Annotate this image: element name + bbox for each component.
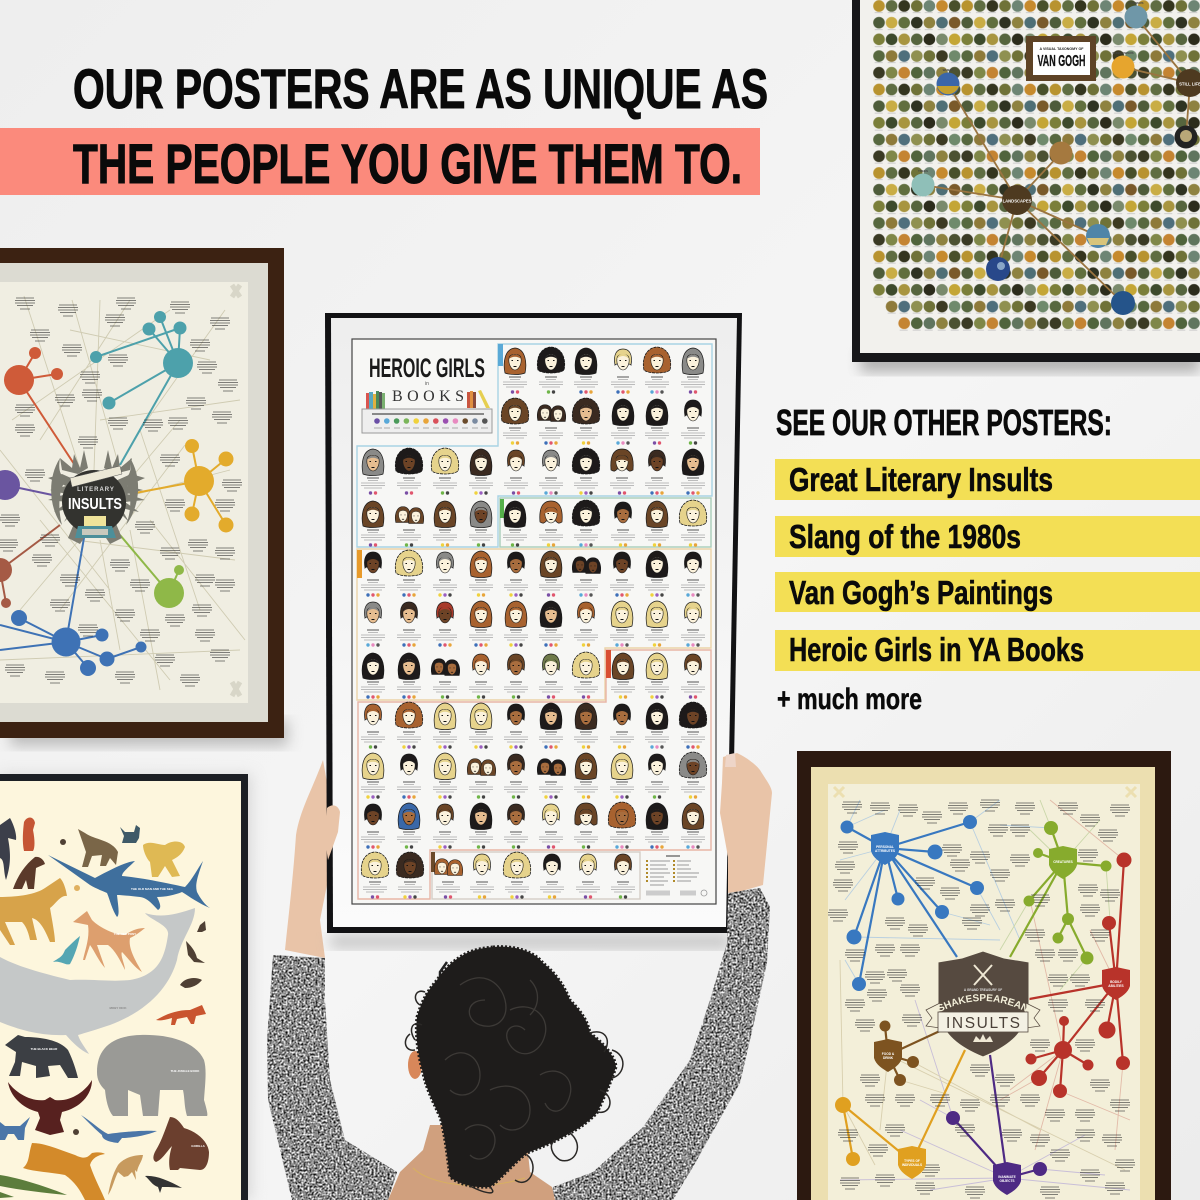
leaping cat [23,1143,105,1200]
corner ornaments [834,787,1136,797]
connector lines [923,17,1190,303]
central Literary Insults emblem [48,450,145,544]
much more note: + much more [777,683,922,716]
poster title: BOOKS [392,388,464,405]
quotation text blocks [0,298,242,686]
central Literary Insults emblem: LITERARY [77,487,115,493]
shield labels: BODILY [1110,980,1123,984]
gorilla [153,1117,209,1170]
node captions: TREES [918,169,928,173]
thin quote lines [840,800,1130,1190]
headline line two: THE PEOPLE YOU GIVE THEM TO. [73,132,742,195]
shield labels: FOOD & [882,1052,895,1056]
Shakespearean Insults shield emblem: A GRAND TREASURY OF [964,988,1002,992]
branch connectors [26,358,73,464]
poster key [646,856,707,896]
Van Gogh title plaque: A VISUAL TAXONOMY OF [1040,47,1084,51]
shield labels: INANIMATE [998,1175,1016,1179]
branch connectors [852,823,972,978]
terrier [120,825,140,843]
blue bird [81,1115,157,1143]
face row 1 [503,347,705,394]
person's left thumb over frame [325,805,340,860]
category nodes [912,6,1200,315]
animal captions: MOBY DICK [109,1006,127,1010]
teal bird [53,936,80,964]
section tabs [357,344,611,872]
Van Gogh title plaque: VAN GOGH [1038,53,1086,70]
wolf [78,829,118,867]
category nodes: LANDSCAPES [1003,198,1032,204]
foliage around emblem [48,450,145,544]
swordfish [48,855,210,917]
green nodes [1024,821,1112,964]
crow [145,1176,182,1193]
person's right arm, hand and sleeve [552,753,772,1200]
animal captions: THE BLACK BEAR [31,1047,58,1051]
person's back and neck [388,1125,555,1200]
face row 8 [361,702,707,749]
animal captions [31,887,206,1148]
bear [5,1035,78,1078]
headline line one: OUR POSTERS ARE AS UNIQUE AS [73,57,768,120]
person's left arm and sleeve [267,760,397,1200]
small rodents and bugs [60,839,206,1135]
shield labels: CREATURES [1053,860,1073,864]
yellow dog [143,841,185,877]
panel: Literary Insults poster in wooden frame [0,248,288,746]
books on shelf [366,390,490,409]
blue cat [0,1117,30,1140]
brown dog [13,857,45,889]
ear [408,1051,422,1079]
gold horse [0,878,67,945]
shield labels: OBJECTS [999,1179,1015,1183]
shield labels: ATTRIBUTES [875,849,895,853]
animal captions: THE RED PONY [114,932,136,936]
red nodes [1026,852,1132,1098]
node captions [918,1,1144,173]
list item: Slang of the 1980s: Slang of the 1980s [789,518,1021,555]
face row 7 [361,652,705,699]
person's curly dark hair [405,947,623,1193]
Shakespearean Insults shield emblem [925,952,1040,1056]
node captions: FLOWERS [1128,1,1144,5]
face row 11 [361,852,635,899]
orange nodes [835,1097,926,1179]
fox [156,1005,206,1025]
shield labels: TYPES OF [904,1159,920,1163]
poster title [369,353,485,405]
shield labels [875,845,1124,1183]
list item: Great Literary Insults: Great Literary Insults [789,461,1053,498]
black horse [0,818,16,880]
list item: Heroic Girls in YA Books: Heroic Girls in YA Books [789,631,1084,668]
animal captions: GORILLA [191,1144,206,1148]
face row 2 [501,398,705,445]
colored nodes [0,311,234,676]
section borders [357,344,712,899]
painting dots grid [873,0,1200,332]
node captions: WHEAT [943,68,954,72]
whale [0,908,195,1054]
node captions: SUNFLOWERS [1112,51,1134,55]
crocodile [0,1175,67,1198]
brown nodes [874,1020,919,1086]
headline [0,57,768,195]
monkey [108,1155,143,1195]
list item: Slang of the 1980s [775,516,1200,557]
animal captions: THE OLD MAN AND THE SEA [131,887,174,891]
glasses on head [440,962,447,992]
corner ornaments [232,285,240,696]
shield labels: ABILITIES [1108,984,1124,988]
eagle [8,1080,92,1135]
face row 3 [361,448,705,495]
poster title: HEROIC GIRLS [369,353,485,383]
Shakespearean Insults shield emblem: INSULTS [946,1015,1020,1032]
Van Gogh title plaque [1026,36,1096,81]
poster list [775,459,1200,716]
quotation text blocks [828,800,1135,1198]
thin quote lines [0,296,245,690]
face row 9 [361,752,707,799]
purple nodes [946,1111,1047,1195]
shield labels: INDIVIDUALS [902,1163,922,1167]
red dog [23,818,35,851]
panel: Van Gogh poster in black frame [852,0,1200,372]
shield labels: PERSONAL [876,845,894,849]
panel: animals poster in black frame [0,774,252,1200]
poster title: in [425,381,429,387]
list item: Van Gogh's Paintings: Van Gogh’s Paintings [789,574,1053,611]
necklace [413,1168,525,1185]
face row 10 [361,802,705,849]
panel: Shakespearean Insults poster in wooden frame [797,751,1171,1200]
face row 5 [361,550,705,597]
salmon highlight bar [0,128,760,195]
face row 6 [361,601,705,647]
peach horse [73,911,145,972]
genre legend shelf [362,409,492,433]
central Literary Insults emblem: INSULTS [68,496,122,513]
animal captions: THE JUNGLE BOOK [171,1069,200,1073]
elephant [97,1035,207,1116]
panel: central Heroic Girls in Books poster [325,313,742,948]
face row 4 [361,500,707,547]
shield labels: DRINK [883,1056,894,1060]
Shakespearean Insults shield emblem: SHAKESPEAREAN [940,994,1026,1012]
blue nodes [840,815,984,991]
